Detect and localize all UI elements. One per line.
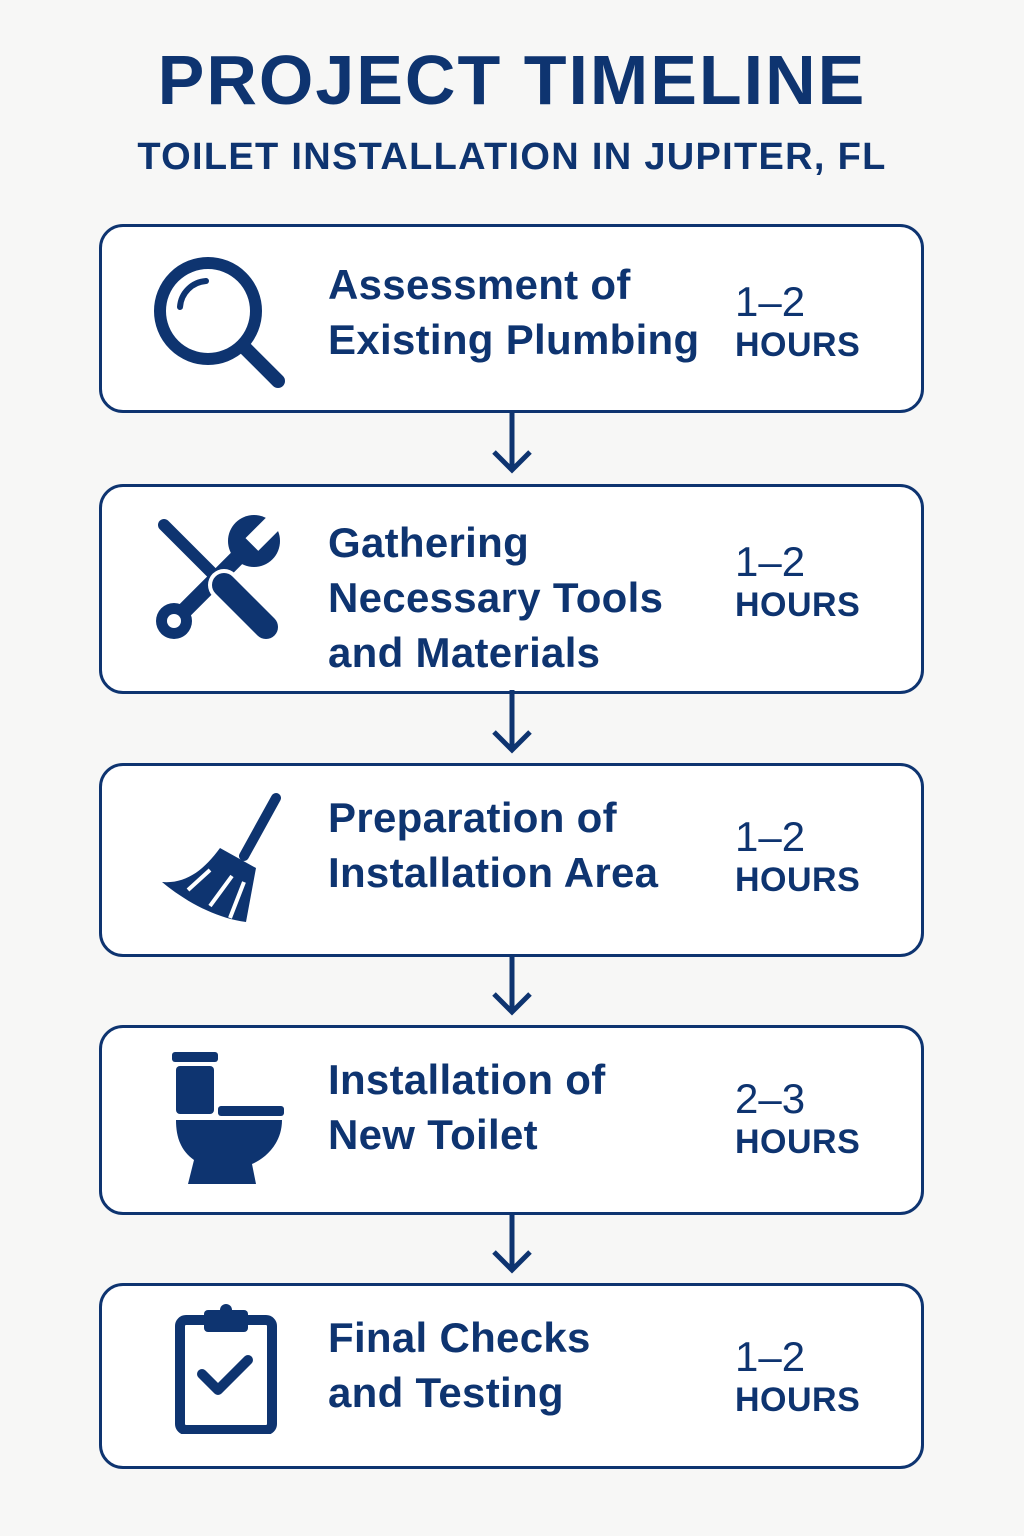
duration: 1–2 <box>735 278 805 325</box>
icon: broom <box>162 793 281 922</box>
duration <box>735 538 860 624</box>
duration <box>735 278 860 364</box>
duration: HOURS <box>735 586 860 624</box>
step text: and Materials <box>328 629 600 676</box>
duration: 1–2 <box>735 813 805 860</box>
icon: magnifier <box>154 257 285 388</box>
title: PROJECT TIMELINE <box>158 41 866 119</box>
step text: Existing Plumbing <box>328 316 699 363</box>
duration: HOURS <box>735 861 860 899</box>
panel: step 1 <box>99 224 924 413</box>
step text <box>328 1314 591 1416</box>
step text: Assessment of <box>328 261 631 308</box>
step text: Gathering <box>328 519 529 566</box>
arrow <box>492 413 532 474</box>
duration: HOURS <box>735 1381 860 1419</box>
step text: Installation Area <box>328 849 658 896</box>
step text <box>328 261 699 363</box>
icon: toilet <box>172 1052 284 1184</box>
step text <box>328 519 663 676</box>
panel: step 3 <box>99 763 924 957</box>
duration <box>735 813 860 899</box>
step text: New Toilet <box>328 1111 538 1158</box>
step text <box>328 794 658 896</box>
subtitle: TOILET INSTALLATION IN JUPITER, FL <box>137 136 887 178</box>
arrow <box>492 957 532 1016</box>
panel: step 4 <box>99 1025 924 1215</box>
icon: clipboard <box>175 1304 277 1434</box>
duration <box>735 1333 860 1419</box>
panel: step 5 <box>99 1283 924 1469</box>
step text: Necessary Tools <box>328 574 663 621</box>
duration: 1–2 <box>735 538 805 585</box>
step text: Final Checks <box>328 1314 591 1361</box>
duration: 1–2 <box>735 1333 805 1380</box>
duration <box>735 1075 860 1161</box>
icon: tools <box>156 515 280 639</box>
panel: step 2 <box>99 484 924 694</box>
duration: HOURS <box>735 1123 860 1161</box>
step text: and Testing <box>328 1369 564 1416</box>
arrow <box>492 690 532 754</box>
step text <box>328 1056 606 1158</box>
duration: HOURS <box>735 326 860 364</box>
step text: Installation of <box>328 1056 606 1103</box>
step text: Preparation of <box>328 794 617 841</box>
duration: 2–3 <box>735 1075 805 1122</box>
arrow <box>492 1215 532 1274</box>
